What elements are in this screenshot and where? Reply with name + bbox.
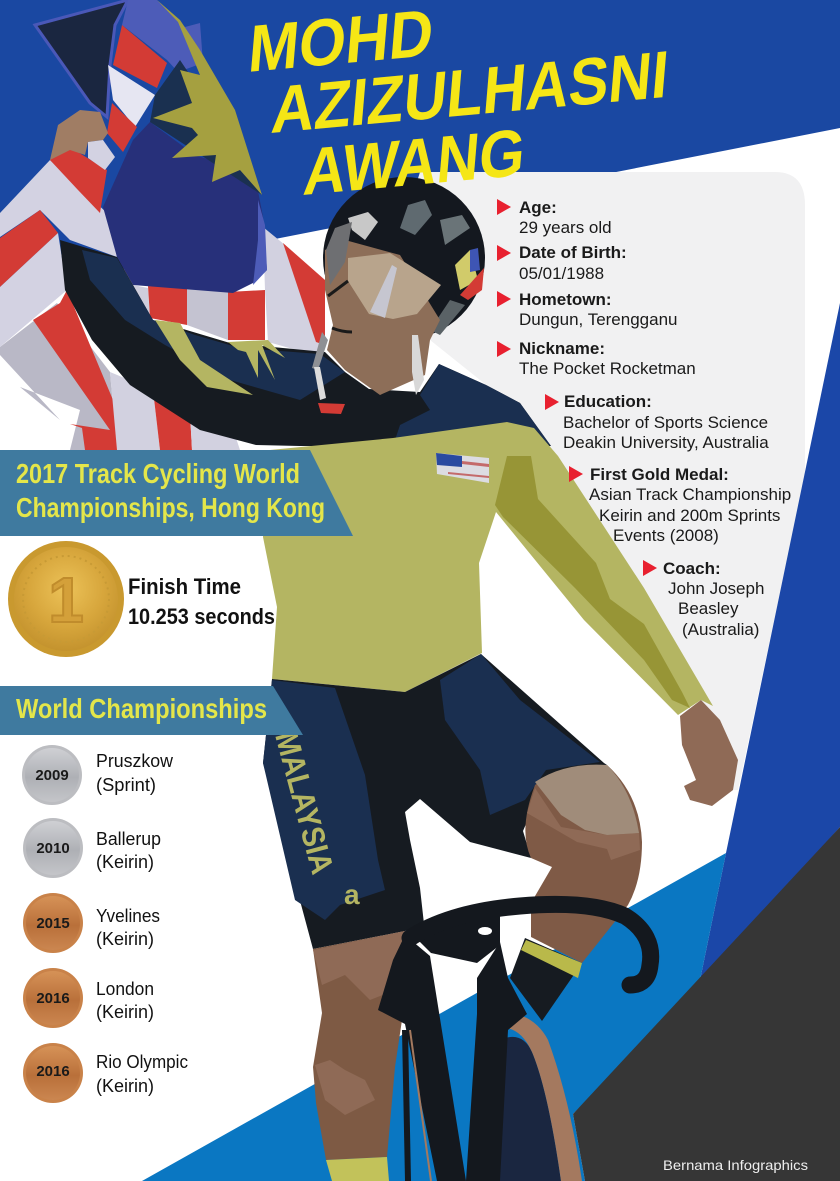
fact: age: Age: (519, 198, 557, 217)
left thin fork (405, 1030, 408, 1181)
banner: world championships: World Championships (16, 693, 267, 724)
flag left white and red folds (0, 143, 117, 347)
crown (410, 912, 500, 963)
medal list (22, 745, 188, 1103)
medal 2015: 2015 (36, 915, 70, 932)
fact: hometown: Dungun, Terengganu (519, 310, 678, 329)
fact: hometown (497, 290, 678, 329)
medal 2016 London (23, 968, 154, 1028)
fact: education: Bachelor of Sports Science (563, 413, 768, 432)
fact: first gold medal: Events (2008) (613, 526, 719, 545)
flag white stripe (108, 65, 155, 127)
right sock band (521, 940, 582, 978)
medal 2009: 2009 (35, 767, 69, 784)
handlebar (410, 904, 651, 985)
medal 2010: (Keirin) (96, 852, 154, 872)
fact: nickname: Nickname: (519, 339, 605, 358)
background: grey info panel (380, 172, 805, 790)
cyclist (60, 177, 738, 1181)
neck strap (412, 335, 424, 395)
fact: education: Deakin University, Australia (563, 433, 769, 452)
fact: first gold medal: First Gold Medal: (590, 465, 729, 484)
medal 2010: 2010 (36, 840, 70, 857)
right hand (680, 700, 738, 806)
helmet (323, 177, 485, 339)
medal 2009: (Sprint) (96, 775, 156, 795)
flag fold under hand (88, 140, 115, 170)
fact: coach: (Australia) (682, 620, 759, 639)
medal 2016 Rio: Rio Olympic (96, 1052, 188, 1072)
fact: first gold medal: Keirin and 200m Sprints (599, 506, 780, 525)
gold medal (8, 541, 124, 657)
medal 2016 London: 2016 (36, 990, 70, 1007)
left leg (313, 931, 410, 1160)
shoulder star (228, 340, 285, 380)
flag lower stripes (0, 227, 325, 450)
left leg mid tone (313, 931, 405, 1000)
fact: age (497, 198, 612, 237)
flag lower red stripe (107, 103, 137, 152)
flag blue canton (103, 122, 267, 293)
fact: coach: John Joseph (668, 579, 764, 598)
medal 2016 Rio (23, 1043, 188, 1103)
background: top blue band (0, 0, 840, 293)
flag yellow star (153, 0, 262, 195)
right sock (510, 938, 582, 1021)
left sock (326, 1157, 389, 1181)
bike frame (378, 904, 651, 1181)
medal 2016 Rio: 2016 (36, 1063, 70, 1080)
fact: hometown: Hometown: (519, 290, 612, 309)
fact: date of birth: Date of Birth: (519, 243, 627, 262)
medal 2015: (Keirin) (96, 929, 154, 949)
title: AZIZULHASNI (269, 38, 671, 148)
medal 2010: Ballerup (96, 829, 161, 849)
lower strap (314, 367, 326, 400)
visor reflection (370, 265, 397, 318)
shorts logo: a (344, 879, 360, 910)
right fork blade (466, 942, 527, 1181)
fact: coach (643, 559, 764, 639)
fact: first gold medal (569, 465, 791, 545)
medal 2010 (23, 818, 161, 878)
bar hole (478, 927, 492, 935)
fact: coach: Coach: (663, 559, 721, 578)
flag dark fold top (35, 0, 128, 117)
athlete profile facts (497, 198, 791, 639)
background: right blue wedge (699, 303, 840, 985)
banner text: 2017 Track Cycling World (16, 458, 300, 489)
arm yellow swoosh (155, 320, 253, 395)
banner: Hong Kong championship: Championships, Hong Kong (16, 492, 325, 523)
medal 2015 (23, 893, 160, 953)
banner: Hong Kong championship (0, 450, 353, 536)
fact: education (545, 392, 769, 452)
flag dark star area (150, 60, 262, 195)
fact: age: 29 years old (519, 218, 612, 237)
background: dark grey corner (573, 827, 840, 1181)
Malaysian flag (0, 0, 325, 450)
fact: nickname: The Pocket Rocketman (519, 359, 696, 378)
arm navy highlights (82, 250, 345, 400)
hand holding flag (50, 110, 108, 160)
jersey torso and sleeve (263, 422, 713, 715)
title (246, 0, 671, 210)
helmet markings (348, 200, 484, 335)
finish time (128, 574, 275, 629)
shorts navy panels (263, 680, 385, 920)
MALAYSIA shorts text: MALAYSIA (268, 727, 341, 878)
fact: coach: Beasley (678, 599, 739, 618)
shorts (263, 654, 607, 949)
finish time: Finish Time (128, 574, 241, 599)
medal 2016 London: London (96, 979, 154, 999)
wheel (495, 1037, 561, 1181)
face (325, 240, 440, 395)
right leg mid tone (527, 788, 640, 860)
medal 2009: Pruszkow (96, 751, 174, 771)
raised arm (60, 240, 551, 446)
eyebrow and lips (328, 281, 352, 332)
fact: date of birth (497, 243, 627, 283)
medal numeral: 1 (48, 564, 84, 636)
right leg (525, 765, 642, 963)
medal 2016 London: (Keirin) (96, 1002, 154, 1022)
background: bright blue stripe (142, 853, 726, 1181)
tyre (506, 1012, 582, 1181)
fact: nickname (497, 339, 696, 378)
helmet rim streaks (326, 222, 352, 285)
collar badge (318, 403, 345, 414)
fact: education: Education: (564, 392, 652, 411)
flag blue edge (253, 200, 267, 285)
medal 2015: Yvelines (96, 906, 160, 926)
flag red stripe (113, 25, 167, 88)
left fork blade (378, 935, 466, 1181)
sleeve shadow (495, 456, 690, 708)
fact: first gold medal: Asian Track Championship (589, 485, 791, 504)
jersey flag patch (436, 453, 489, 483)
title: AWANG (301, 116, 528, 210)
right thigh highlight (535, 765, 639, 835)
banner: world championships (0, 686, 303, 735)
chin strap (312, 332, 328, 370)
fact: date of birth: 05/01/1988 (519, 264, 604, 283)
flag blue stripe (122, 0, 203, 72)
medal 2016 Rio: (Keirin) (96, 1076, 154, 1096)
visor (348, 253, 441, 319)
shoulder navy (395, 364, 551, 446)
medal 2009 (22, 745, 174, 805)
finish time: 10.253 seconds (128, 604, 275, 629)
credit: Bernama Infographics (663, 1157, 808, 1173)
